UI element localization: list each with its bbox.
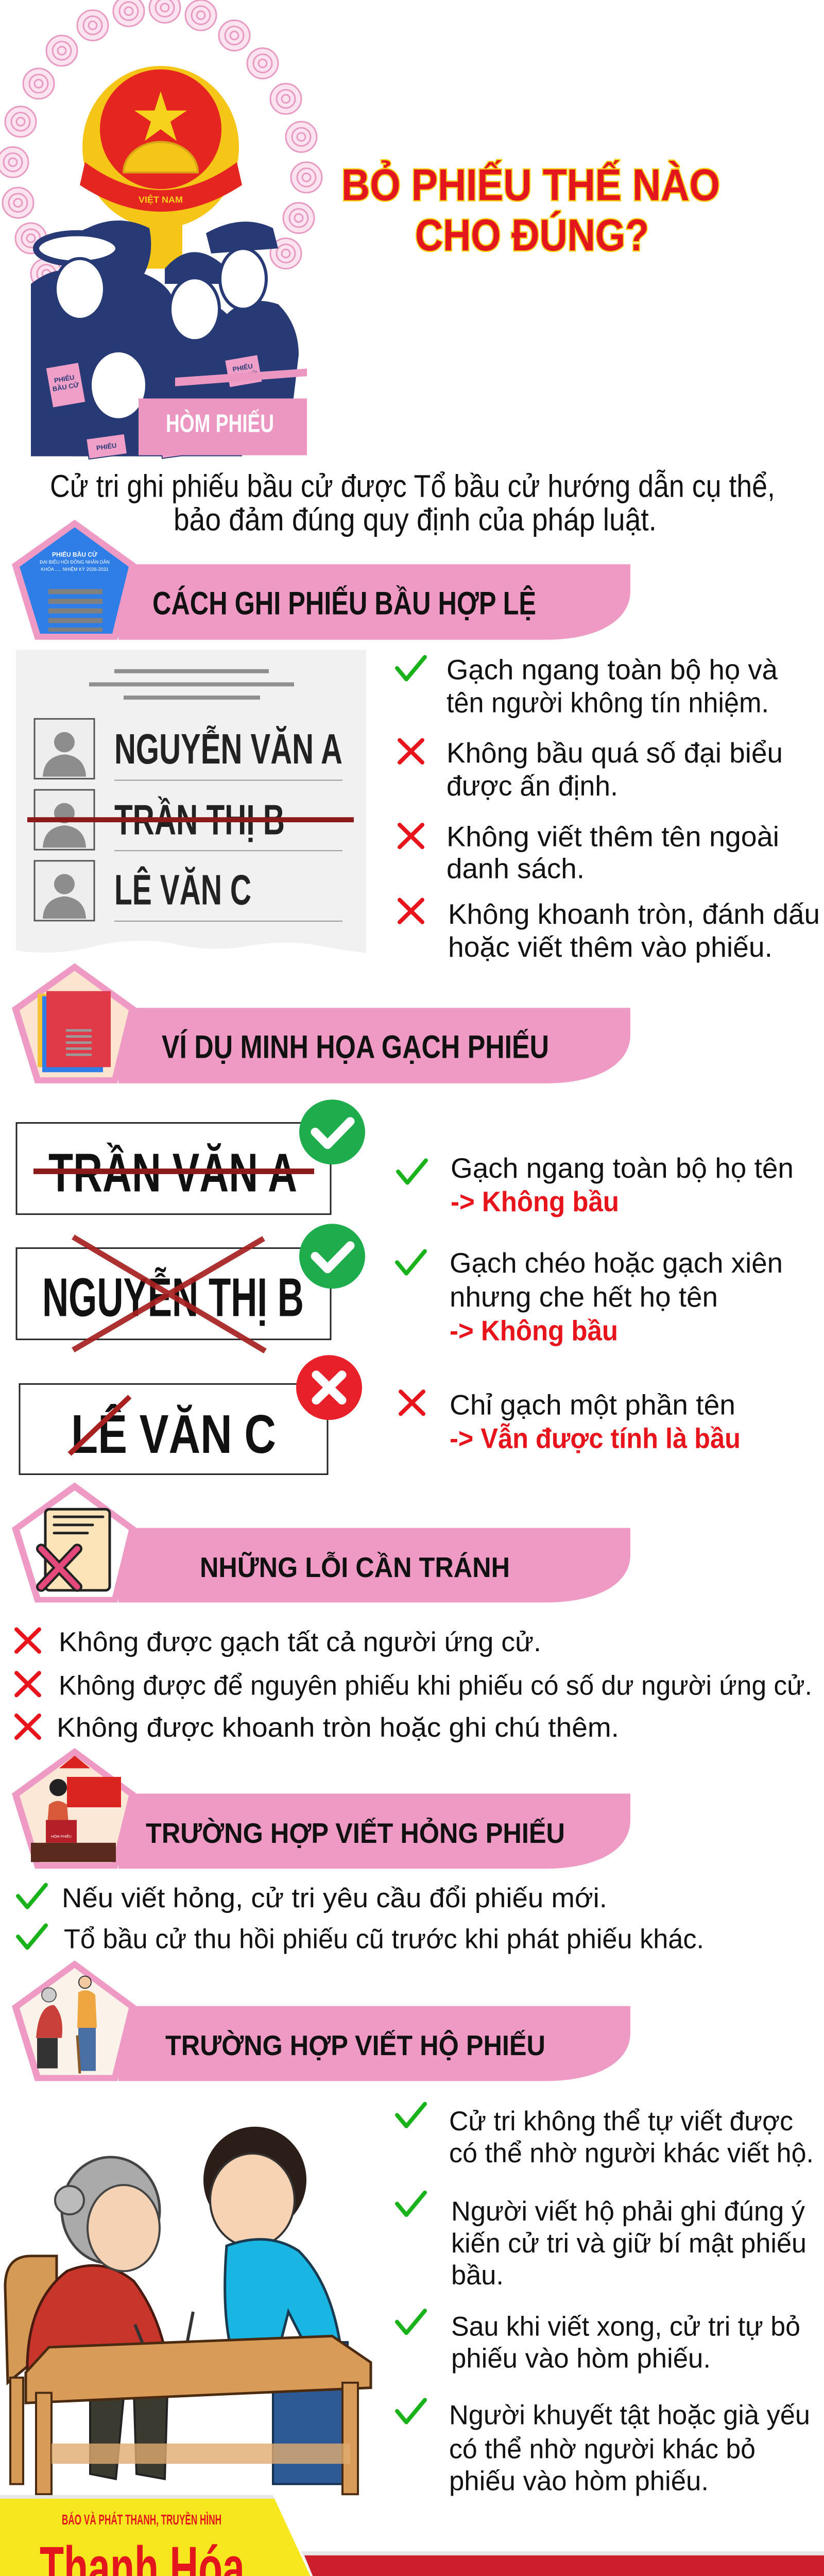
rules list 1: danh sách.: [447, 853, 585, 884]
example explanations: [397, 1152, 794, 1454]
example explanations: Gạch chéo hoặc gạch xiên: [450, 1247, 783, 1279]
example 3: [20, 1355, 362, 1474]
spoiled ballot list: Nếu viết hỏng, cử tri yêu cầu đổi phiếu mới.: [62, 1883, 607, 1913]
rules list 1: Không viết thêm tên ngoài: [447, 821, 779, 852]
icon: ballot pentagon: ĐẠI BIỂU HỘI ĐỒNG NHÂN DÂN: [40, 559, 110, 565]
ballot box: [139, 368, 307, 455]
proxy writing list: có thể nhờ người khác bỏ: [449, 2434, 756, 2464]
spoiled ballot list: [18, 1883, 704, 1954]
errors list: Không được khoanh tròn hoặc ghi chú thêm.: [57, 1713, 619, 1743]
section header 3: những lỗi cần tránh: NHỮNG LỖI CẦN TRÁNH: [200, 1552, 510, 1583]
icon: green check circle: [299, 1099, 365, 1164]
intro text: [50, 469, 775, 537]
row 3: [35, 861, 342, 922]
example explanations: Chỉ gạch một phần tên: [450, 1389, 735, 1420]
footer: [0, 2495, 824, 2576]
example explanations: nhưng che hết họ tên: [450, 1281, 718, 1313]
rules list 1: được ấn định.: [447, 770, 618, 802]
illustration: helper writing for elderly voter: [5, 2127, 371, 2494]
proxy writing list: bầu.: [451, 2260, 504, 2291]
example explanations: -> Không bầu: [451, 1185, 619, 1217]
icon: ballot pentagon: [12, 520, 136, 640]
ballot cards: PHIẾU: [232, 362, 253, 373]
row 1: NGUYỄN VĂN A: [114, 725, 342, 773]
errors list: [16, 1627, 812, 1743]
logo block: BÁO VÀ PHÁT THANH, TRUYỀN HÌNH: [62, 2512, 221, 2528]
old woman: [27, 2265, 170, 2393]
row 2: [27, 790, 354, 851]
rules list 1: Không bầu quá số đại biểu: [447, 737, 783, 769]
paper and pens: [139, 2347, 206, 2389]
section header 2: ví dụ minh họa: [12, 963, 630, 1083]
section header 3: những lỗi cần tránh: [12, 1482, 630, 1602]
icon: woman voting: [12, 1748, 136, 1869]
title: BỎ PHIẾU THẾ NÀO: [341, 160, 720, 210]
section header 4: viết hỏng phiếu: [12, 1748, 630, 1869]
chair: [5, 2256, 57, 2383]
example 1: TRẦN VĂN A: [48, 1142, 297, 1203]
example explanations: -> Không bầu: [450, 1315, 618, 1347]
logo block: [0, 2499, 331, 2576]
ballot cards: PHIẾU: [96, 442, 117, 452]
proxy writing list: Người viết hộ phải ghi đúng ý: [451, 2196, 805, 2227]
row 3: LÊ VĂN C: [114, 866, 251, 913]
section header 1: cách ghi phiếu: CÁCH GHI PHIẾU BẦU HỢP LỆ: [152, 585, 536, 621]
errors list: Không được gạch tất cả người ứng cử.: [59, 1627, 541, 1657]
rose wreath: [0, 0, 322, 319]
proxy writing list: có thể nhờ người khác viết hộ.: [449, 2138, 814, 2168]
example 2: [16, 1224, 365, 1351]
ballot cards: BẦU CỬ: [52, 381, 80, 393]
ballot cards: BẦU CỬ: [230, 369, 258, 382]
voters: [31, 221, 299, 456]
section header 5: viết hộ phiếu: TRƯỜNG HỢP VIẾT HỘ PHIẾU: [165, 2030, 545, 2061]
table: [26, 2336, 371, 2403]
spoiled ballot list: Tổ bầu cử thu hồi phiếu cũ trước khi phát phiếu khác.: [64, 1924, 704, 1954]
ballot cards: PHIẾU: [54, 374, 75, 384]
example 3: LÊ VĂN C: [71, 1403, 276, 1465]
title: CHO ĐÚNG?: [415, 211, 649, 260]
ballot sample: [16, 650, 366, 953]
emblem: VIỆT NAM: [139, 194, 183, 205]
ballot cards: [46, 354, 263, 459]
proxy writing list: Sau khi viết xong, cử tri tự bỏ: [451, 2312, 800, 2342]
boy: [203, 2127, 306, 2233]
proxy writing list: [397, 2104, 814, 2496]
icon: ballot pentagon: KHÓA ..... NHIỆM KỲ 2026-2031: [41, 567, 109, 572]
example 1: [16, 1099, 365, 1214]
icon: green check circle: [299, 1224, 365, 1289]
icon: red x circle: [296, 1355, 362, 1420]
intro text: bảo đảm đúng quy định của pháp luật.: [174, 502, 657, 537]
header illustration: emblem and voters: [0, 0, 322, 459]
proxy writing list: kiến cử tri và giữ bí mật phiếu: [451, 2228, 806, 2259]
icon: red ballot: [12, 963, 136, 1083]
proxy writing list: Người khuyết tật hoặc già yếu: [449, 2400, 810, 2430]
example explanations: -> Vẫn được tính là bầu: [450, 1422, 741, 1454]
proxy writing list: phiếu vào hòm phiếu.: [449, 2466, 709, 2496]
icon: helper and elderly: [12, 1960, 136, 2081]
title: [341, 160, 720, 260]
section header 5: viết hộ phiếu: [12, 1960, 630, 2081]
rules list 1: [397, 654, 820, 963]
example explanations: Gạch ngang toàn bộ họ tên: [451, 1152, 794, 1184]
section header 1: cách ghi phiếu: [12, 520, 630, 640]
icon: ballot pentagon: PHIẾU BẦU CỬ: [52, 551, 97, 558]
rules list 1: Gạch ngang toàn bộ họ và: [447, 654, 778, 685]
rules list 1: tên người không tín nhiệm.: [447, 687, 769, 718]
ballot cards: BẦU CỬ: [161, 413, 189, 425]
section header 2: ví dụ minh họa: VÍ DỤ MINH HỌA GẠCH PHIẾU: [162, 1029, 549, 1065]
row 2: TRẦN THỊ B: [114, 796, 285, 844]
rules list 1: hoặc viết thêm vào phiếu.: [448, 931, 772, 963]
ballot box: HÒM PHIẾU: [166, 409, 274, 437]
emblem: [80, 66, 242, 269]
proxy writing list: Cử tri không thể tự viết được: [449, 2106, 793, 2137]
icon: woman voting: HÒM PHIẾU: [51, 1834, 72, 1839]
rules list 1: Không khoanh tròn, đánh dấu: [448, 898, 820, 930]
proxy writing list: phiếu vào hòm phiếu.: [451, 2344, 711, 2374]
ballot cards: PHIẾU: [163, 406, 184, 416]
example 2: NGUYỄN THỊ B: [42, 1266, 304, 1328]
icon: document with x: [12, 1482, 136, 1602]
section header 4: viết hỏng phiếu: TRƯỜNG HỢP VIẾT HỎNG PHIẾU: [146, 1817, 565, 1849]
row 1: [35, 719, 342, 781]
